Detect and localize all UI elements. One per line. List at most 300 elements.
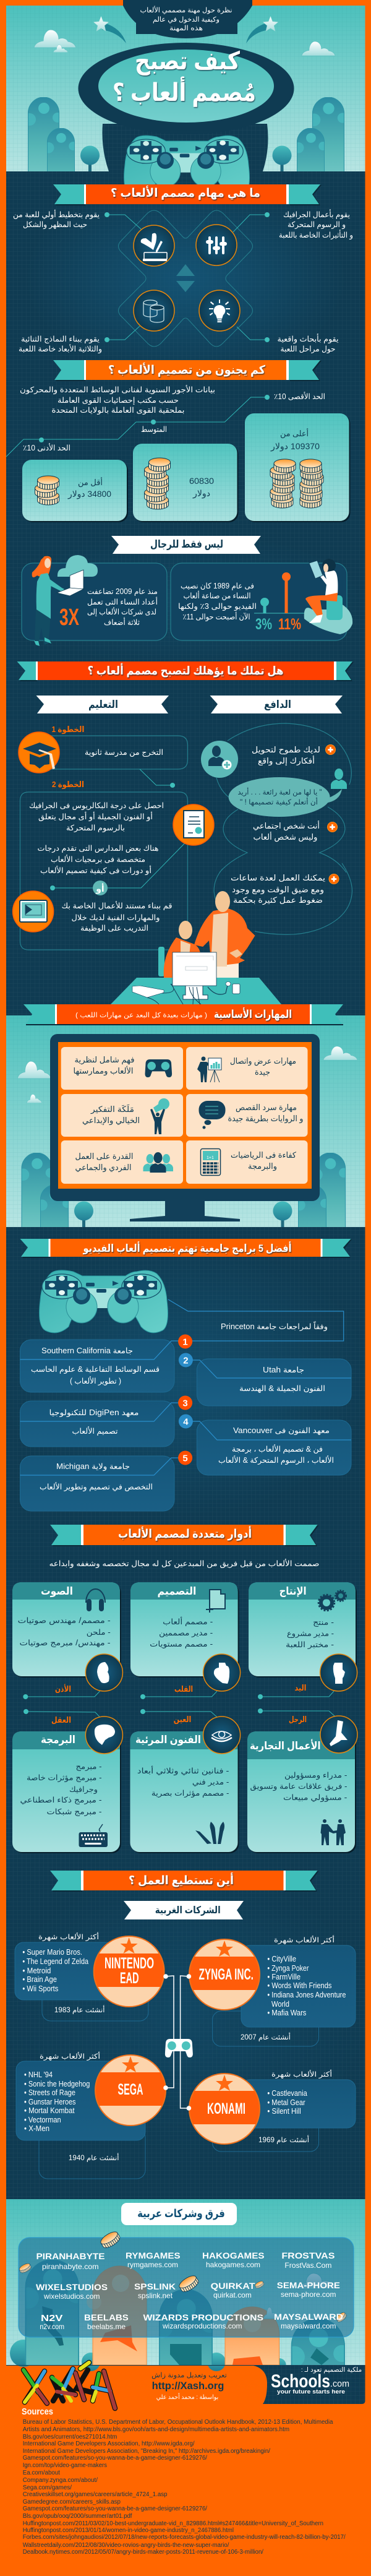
icon: hand (333, 1663, 345, 1684)
banner: do you qualify heading: هل تملك ما يؤهلك لتصبح مصمم ألعاب ؟ (88, 663, 283, 678)
banner: where to work heading (50, 1871, 319, 1892)
label: wage levels: الحد الأقصى 10٪ (274, 392, 325, 401)
company: sega: SEGA (117, 2081, 143, 2098)
text: wages intro: حسب مكتب إحصائيات القوى العاملة (58, 396, 179, 405)
cloud: right (323, 1046, 357, 1060)
role card: programming: - مبرمج ذكاء اصطناعي (20, 1796, 101, 1805)
icon: light bulb (209, 299, 230, 322)
task: 2d 3d models: والثلاثية الأبعاد خاصة اللعبة (19, 344, 102, 354)
role card: programming (12, 1731, 121, 1853)
shooting star: left (93, 16, 126, 43)
task: graphics: و الرسوم المتحركة (288, 220, 346, 230)
company: sega: • Mortal Kombat (24, 2106, 75, 2115)
company: sega: • Gunstar Heroes (24, 2097, 76, 2106)
cloud: left small (53, 45, 68, 53)
studio: beelabs (84, 2312, 129, 2331)
speech bubble: quote: أن أتعلم كيفية تصميمها ! " (240, 797, 318, 806)
panel: dark section 1 (6, 124, 365, 1015)
university 4: معهد الفنون فى Vancouver (233, 1426, 330, 1436)
university 3: 3 (182, 1398, 188, 1408)
role card: programming: - مبرمج مؤثرات خاصة (27, 1773, 102, 1783)
skill: math (186, 1140, 308, 1184)
text: arabization credit: http://Xash.org (152, 2380, 224, 2392)
ribbon: motivation: الدافع (264, 699, 291, 711)
role card: business: الأعمال التجارية (250, 1739, 321, 1752)
icon: ear (97, 1662, 109, 1683)
icon: keyboard (132, 984, 183, 1004)
company: nintendo: EAD (120, 1970, 139, 1987)
university 2: جامعة Utah (263, 1366, 304, 1374)
role card: production: - مدير مشروع (287, 1629, 334, 1639)
towers: five state towers (18, 2260, 351, 2488)
illustration: woman on cloud (304, 559, 352, 634)
role card: sound (12, 1582, 121, 1678)
text: sources: Bls.gov/oes/current/oes271014.htm (23, 2434, 117, 2440)
skill: imagination (61, 1094, 183, 1137)
company: zynga: • Zynga Poker (267, 1963, 309, 1973)
studio: hakogames: HAKOGAMES (202, 2251, 265, 2260)
text: sources: Huffingtonpost.com/2011/03/02/10-best-undergraduate-vid_n_829886.html#s247466&title=University_of_Southern (23, 2520, 323, 2527)
role card: design (130, 1582, 239, 1678)
icon: desk (111, 978, 281, 1004)
step 2: التدريب على الوظيفة (80, 924, 148, 933)
university 1: قسم الوسائط التفاعلية & علوم الحاسب (31, 1365, 160, 1374)
company: sega: • Vectorman (24, 2115, 61, 2124)
university 2 (179, 1353, 351, 1406)
role card: design: - مدير مصممين (159, 1629, 213, 1638)
ribbon: western companies (124, 1901, 244, 1919)
connector: companies to gamepad (166, 1976, 189, 2108)
icon: plus badge (327, 822, 338, 832)
card: median: دولار (192, 488, 210, 499)
skill: presentation: مهارات عرض واتصال (230, 1056, 296, 1066)
icon: coin stacks (270, 459, 323, 508)
role labels: brain: العقل (51, 1715, 71, 1725)
task: research: يقوم بأبحاث واقعية (277, 334, 339, 344)
step 2: الخطوة 2 (52, 780, 84, 789)
company: nintendo: • Super Mario Bros. (22, 1947, 82, 1957)
role card: production: - منتج (313, 1618, 334, 1627)
panel: motivation bubble 2: أنت شخص اجتماعي (253, 821, 320, 831)
top tab with subtitle: وكيفية الدخول في عالم (153, 16, 220, 24)
company: nintendo: • Metroid (22, 1966, 51, 1975)
company: konami: • Castlevania (267, 2088, 307, 2098)
panel: motivation bubble 2 (220, 807, 346, 872)
banner: designer tasks heading: ما هي مهام مصمم الألعاب ؟ (111, 186, 260, 200)
studio: rymgames: rymgames.com (127, 2260, 178, 2269)
role labels: hand: اليد (294, 1683, 307, 1692)
banner: multiple roles heading: أدوار متعددة لمصمم الألعاب (118, 1526, 252, 1541)
role card: visual arts: - مصمم مؤثرات بصرية (151, 1789, 229, 1798)
skill: presentation (186, 1047, 308, 1090)
studio: quirkat (211, 2281, 255, 2299)
task: graphics: يقوم بأعمال الجرافيك (283, 209, 351, 220)
studio: maysalward (274, 2312, 343, 2330)
university 3: تصميم الألعاب (72, 1426, 118, 1436)
banner: designer tasks heading (53, 184, 322, 205)
role labels: brain (23, 1709, 100, 1725)
panel: motivation bubble 1 (201, 723, 351, 798)
icon: laptop (57, 570, 83, 596)
text: sources: Gamedegree.com/careers_skills.asp (23, 2499, 121, 2505)
studio: wixelstudios: WIXELSTUDIOS (36, 2282, 108, 2292)
icon: headphones (86, 1589, 105, 1611)
role card: design: التصميم (157, 1585, 197, 1597)
company: sega: • Sonic the Hedgehog (24, 2079, 90, 2088)
card: median: 60830 (189, 476, 214, 486)
text: wages intro (20, 385, 215, 415)
step 2: متخصصة فى برمجيات الألعاب (51, 855, 145, 864)
text: sources: Ign.com/top/video-game-makers (23, 2462, 107, 2469)
text: sources: Gamespot.com/features/so-you-wanna-be-a-game-designer-6129276/ (23, 2505, 207, 2512)
panel: women tripled (22, 555, 167, 646)
panel: skills sky (6, 1015, 365, 1274)
company: konami: • Silent Hill (267, 2106, 301, 2116)
role card: design: - مصمم مستويات (150, 1640, 213, 1649)
banner: core skills heading: ( مهارات بعيدة كل البعد عن مهارات اللعب ) (75, 1012, 207, 1019)
text: sources: Creativeskillset.org/games/careers/article_4724_1.asp (23, 2491, 168, 2498)
skill: storytelling: و الروايات بطريقة جيدة (228, 1114, 303, 1124)
university 4: فن & تصميم الألعاب ، برمجة (232, 1444, 323, 1454)
company: sega (16, 2051, 168, 2179)
role card: sound: - ملحن (87, 1628, 111, 1637)
studio: n2v (40, 2313, 64, 2331)
icon: computer monitor (173, 952, 216, 1004)
role card: production (249, 1582, 357, 1678)
company: zynga: • CityVille (267, 1954, 296, 1963)
task: concept sketch (13, 209, 174, 266)
role card: programming: - مبرمج شبكات (47, 1807, 101, 1817)
company: nintendo: • Wii Sports (22, 1984, 59, 1993)
skill: teamwork: القدرة على العمل (75, 1152, 134, 1161)
controller: universities (40, 1270, 168, 1333)
university 2: الفنون الجميلة & الهندسة (239, 1384, 325, 1394)
company: nintendo: • Brain Age (22, 1975, 57, 1984)
role card: programming: البرمجة (41, 1734, 75, 1746)
role card: design: - مصمم ألعاب (163, 1616, 213, 1627)
panel: team list glass (19, 2238, 354, 2337)
chart: pin comparison (254, 572, 304, 633)
text: sources: Ea.com/about (23, 2470, 60, 2476)
university 5: جامعة ولاية Michigan (56, 1462, 130, 1471)
icon: butterfly on tablet (141, 233, 167, 261)
role card: visual arts: - فنانين ثنائي وثلاثي أبعاد (137, 1765, 229, 1776)
text: sources: Wallstreetdaily.com/2012/08/30/video-rovios-angry-birds-the-new-super-mario/ (23, 2542, 229, 2549)
company: konami: أنشئت عام 1969 (258, 2135, 309, 2144)
step 2: والمهارات الفنية لديك خلال (72, 913, 160, 923)
step 2: احصل على درجة البكالريوس فى الجرافيك (29, 801, 164, 811)
role labels: ear: الأذن (55, 1684, 71, 1694)
company: zynga: World (271, 1999, 289, 2009)
role card: business: - فريق علاقات عامة وتسويق (250, 1782, 348, 1791)
studio: wizards productions: wizardsproductions.com (162, 2322, 242, 2330)
studio: wixelstudios (36, 2282, 108, 2301)
company: sega: • Streets of Rage (24, 2088, 75, 2097)
text: sources: Huffingtonpost.com/2013/01/14/women-in-video-game-industry_n_2467886.html (23, 2527, 234, 2534)
studio: wizards productions: WIZARDS PRODUCTIONS (143, 2312, 263, 2322)
company: konami: • Metal Gear (267, 2098, 305, 2107)
banner: multiple roles heading (50, 1525, 319, 1546)
role card: production: الإنتاج (279, 1585, 307, 1598)
role labels: heart (140, 1654, 241, 1699)
text: sources: Artists and Animators, http://www.bls.gov/ooh/arts-and-design/multimedia-artists-and-animators.htm (23, 2426, 289, 2433)
banner: core skills heading: المهارات الأساسية (214, 1007, 292, 1021)
task: research: حول مراحل اللعبة (281, 345, 335, 354)
university 3 (20, 1396, 192, 1447)
icon: sliders (206, 236, 227, 254)
card: top 10 percent (245, 413, 350, 522)
panel: women share: النساء من صناعة ألعاب (183, 590, 251, 601)
university 1: 1 (182, 1337, 188, 1348)
step 2: قم ببناء مستند للأعمال الخاصة بك (62, 901, 173, 911)
studio: piranhabyte: piranhabyte.com (42, 2262, 99, 2271)
task: research (199, 290, 339, 354)
title ellipse (78, 43, 294, 134)
title ellipse: مُصمم ألعاب ؟ (113, 76, 256, 107)
icon: plus badge (325, 744, 336, 755)
university 3: معهد DigiPen للتكنولوجيا (49, 1408, 139, 1418)
panel: schools.com credit: .com (330, 2379, 349, 2389)
skill: game theory (61, 1047, 183, 1090)
cloud: behind right names (296, 2273, 340, 2289)
studio: frostvas: FROSTVAS (281, 2251, 335, 2260)
skill: game theory: الألعاب وممارستها (73, 1066, 134, 1076)
company: zynga: • FarmVille (267, 1972, 301, 1981)
panel: women share: الآن أصبحت حوالى 11٪ (183, 611, 250, 622)
icon: cloud behind laptop (58, 555, 98, 577)
ribbon: not only for men (111, 536, 261, 554)
company: zynga: أنشئت عام 2007 (241, 2032, 291, 2041)
university 5: التخصص في تصميم وتطوير الألعاب (40, 1482, 153, 1492)
role card: business (247, 1731, 356, 1853)
banner: do you qualify heading (17, 661, 354, 681)
connectors: wage levels (6, 395, 270, 457)
task: graphics (196, 209, 353, 265)
label: wage levels (23, 392, 325, 452)
card: bottom 10 percent: أقل من (78, 477, 103, 488)
panel: hero sky (6, 6, 365, 215)
icon: portfolio monitor (20, 900, 47, 922)
pill: arab companies heading: فرق وشركات عربية (137, 2207, 225, 2220)
towers: left (17, 1153, 93, 1274)
towers: right (272, 97, 348, 215)
icon: graduation cap (23, 743, 56, 769)
studio: piranhabyte: PIRANHABYTE (36, 2251, 105, 2261)
text: sources (22, 2406, 346, 2556)
university 4 (179, 1415, 351, 1475)
text: sources: Dealbook.nytimes.com/2012/05/07/angry-birds-maker-posts-2011-revenue-of-106-3-million/ (23, 2549, 263, 2556)
monitor: skills grid (50, 1034, 320, 1221)
company: zynga: • Indiana Jones Adventure (267, 1990, 346, 1999)
studio: n2v: n2v.com (40, 2322, 64, 2331)
task: 2d 3d models (19, 290, 174, 354)
company: sega: أكثر الألعاب شهرة (40, 2051, 100, 2061)
role card: sound: - مهندس/ مبرمج صوتيات (20, 1639, 110, 1648)
skill: math: 1+1 (207, 1156, 214, 1160)
speech bubble: quote (229, 769, 347, 817)
panel: motivation bubble 3 (214, 863, 352, 934)
banner: top five programs heading: أفضل 5 برامج جامعية تهتم بتصميم ألعاب الفيديو (83, 1241, 292, 1255)
panel: motivation bubble 3: ضغوط عمل كثيرة بحكمة (233, 895, 323, 905)
panel: schools.com credit: Schools (271, 2371, 330, 2392)
cloud: small left (27, 1094, 42, 1103)
task: concept sketch: يقوم بتخطيط أولي للعبة من (13, 209, 100, 220)
company: sega: • X-Men (24, 2124, 49, 2133)
cloud: small name (263, 2307, 278, 2319)
banner: top five programs heading (20, 1239, 352, 1258)
role card: programming: - مبرمج (75, 1762, 101, 1772)
studio: n2v: N2V (41, 2313, 62, 2324)
role card: sound: الصوت (41, 1585, 73, 1598)
task: 2d 3d models: يقوم ببناء النماذج الثنائية (21, 335, 100, 344)
panel: motivation bubble 2: وليس شخص ألعاب (254, 832, 318, 842)
studio: wizards productions (143, 2312, 263, 2330)
ribbon: education: التعليم (88, 699, 118, 710)
role labels: leg (258, 1708, 335, 1724)
icon: keyboard (79, 1824, 108, 1847)
panel: women share: فى عام 1989 كان نصيب (181, 582, 254, 590)
text: sources: Gamespot.com/features/so-you-wanna-be-a-game-designer-6129276/ (23, 2455, 207, 2462)
university 4: 4 (183, 1417, 189, 1427)
skill: math: كفاءة فى الرياضيات (231, 1150, 297, 1160)
studio: hakogames: hakogames.com (206, 2260, 260, 2269)
text: sources: Bls.gov/opub/ooq/2000/summer/art01.pdf (23, 2513, 132, 2520)
icon: center triangles (176, 264, 195, 292)
diagram: tasks cross outline (119, 210, 252, 347)
step 2: بالرسوم المتحركة (66, 824, 125, 833)
skill: game theory: فهم شامل لنظرية (74, 1055, 135, 1065)
text: sources: Sources (22, 2406, 53, 2417)
skill: presentation: جيدة (255, 1067, 270, 1077)
skill: teamwork: الفردي والجماعي (75, 1163, 131, 1173)
company: nintendo: أنشئت عام 1983 (54, 2005, 104, 2014)
banner: where to work heading: أين تستطيع العمل ؟ (129, 1872, 234, 1887)
role card: visual arts: الفنون المرئية (135, 1734, 201, 1746)
icon: small person (331, 769, 347, 789)
step 1: الخطوة 1 (51, 725, 84, 734)
panel: women tripled: 3X (59, 605, 79, 631)
card: bottom 10 percent (22, 460, 128, 522)
box: princeton review note: وفقاً لمراجعات جامعة Princeton (221, 1320, 328, 1332)
pill: arab companies heading (121, 2203, 237, 2225)
icon: floating coins (19, 2229, 348, 2323)
text: sources: Forbes.com/sites/johngaudiosi/2012/07/18/new-reports-forecasts-global-video-game-industry-will-reach-82-billion-by-2017/ (23, 2534, 346, 2541)
icon: diploma (184, 811, 204, 838)
studio: maysalward: maysalward.com (281, 2322, 336, 2330)
icon: mouse and mug (208, 981, 240, 994)
controller: hero (124, 136, 249, 197)
footer rule (6, 2365, 365, 2366)
ribbon: motivation (210, 696, 343, 713)
icon: heart (214, 1663, 229, 1684)
icon: brain (95, 1725, 115, 1745)
company: sega: أنشئت عام 1940 (69, 2153, 119, 2162)
task: graphics: و التأثيرات الخاصة باللعبة (279, 230, 353, 240)
towers: left (23, 97, 100, 215)
university 4: الألعاب ، الرسوم المتحركة & الألعاب (218, 1455, 334, 1465)
studio: piranhabyte (36, 2251, 105, 2271)
studio: sema-phore (277, 2280, 340, 2299)
text: sources: International Game Developers Association, http://www.igda.org/ (23, 2440, 195, 2447)
skill: storytelling: مهارة سرد القصص (236, 1103, 297, 1113)
university 2: 2 (183, 1355, 189, 1366)
role labels: eye: العين (174, 1715, 191, 1724)
text: arabization credit: بواسطة : محمد أحمد علي (156, 2393, 218, 2401)
step 2: أو الفنون الجميلة أو أى مجال يتعلق (38, 811, 153, 822)
connector: step 1 to step 2 (140, 769, 175, 788)
step 2: أو (95, 883, 104, 894)
company: zynga: • Mafia Wars (267, 2008, 307, 2017)
panel: women tripled: ثلاثة أضعاف (104, 617, 140, 627)
company: konami: أكثر الألعاب شهرة (271, 2069, 332, 2079)
icon: brushes (195, 1822, 224, 1844)
panel: women tripled: أعداد النساء التى تعمل (87, 597, 158, 606)
panel: schools.com credit (250, 2365, 365, 2404)
company: konami: KONAMI (207, 2100, 245, 2117)
studio: maysalward: MAYSALWARD (274, 2312, 343, 2322)
box: princeton review note (168, 1299, 344, 1341)
panel: motivation bubble 1: لديك طموح لتحويل (252, 745, 320, 755)
skill: storytelling (186, 1094, 308, 1137)
text: arabization credit: تعريب وتعديل مدونة زاش (151, 2372, 227, 2379)
text: wages intro: بملحقية القوى العاملة بالولايات المتحدة (52, 406, 184, 415)
task: concept sketch: حيث المظهر والشكل (23, 220, 87, 230)
cloud: left (17, 1061, 51, 1079)
university 1 (20, 1334, 192, 1392)
icon: gears (318, 1590, 346, 1611)
illustration: woman at laptop (32, 556, 64, 646)
icon: handshake (320, 1819, 346, 1845)
icon: coin stack (35, 476, 59, 505)
skill: imagination: مَلَكَة التفكير (90, 1104, 134, 1114)
card: top 10 percent: 109370 دولار (270, 441, 320, 452)
role card: visual arts: - مدير فني (192, 1778, 229, 1787)
card: bottom 10 percent: 34800 دولار (67, 489, 111, 499)
text: sources: International Game Developers Association, "Breaking In," http://archives.igda.org/breakingin/ (23, 2448, 270, 2455)
ribbon: not only for men: ليس فقط للرجال (150, 538, 223, 551)
icon: cylinders (143, 300, 164, 322)
studio: rymgames (126, 2251, 181, 2269)
icon: leg (330, 1720, 348, 1746)
top tab with subtitle (123, 0, 252, 38)
circles: brain eye leg (85, 1716, 357, 1754)
panel: dark section 2 (0, 1227, 371, 2199)
icon: central gamepad (165, 2039, 193, 2057)
company: zynga (187, 1935, 356, 2046)
panel: schools.com credit: ملكية التصميم تعود لـ : (301, 2366, 362, 2374)
studio: spslink: SPSLINK (134, 2281, 176, 2291)
text: sources: Company.zynga.com/about/ (23, 2477, 98, 2484)
panel: women share: الفيديو حوالى 3٪ ولكنها (178, 602, 257, 611)
panel: motivation bubble 3: ومع ضيق الوقت ومع وجود (232, 885, 324, 895)
text: sources: Sega.com/games/ (23, 2484, 72, 2491)
university 5 (20, 1450, 192, 1511)
studio: beelabs: BEELABS (84, 2312, 129, 2322)
university 1: ( تطوير الألعاب ) (70, 1376, 121, 1386)
cloud: left large (34, 30, 76, 48)
ribbon: western companies: الشركات الغربية (155, 1905, 221, 1916)
company: konami (187, 2069, 356, 2152)
role labels: heart: القلب (174, 1684, 193, 1694)
illustration: two men at desk (111, 891, 281, 1004)
role labels: eye (140, 1709, 217, 1724)
role card: sound: - مصمم/ مهندس صوتيات (18, 1616, 111, 1626)
icon: coin stack (145, 458, 171, 509)
studio: spslink: spslink.net (138, 2291, 173, 2300)
speech bubble: quote: " يا لها من لعبة رائعة . . . أريد (237, 787, 322, 797)
banner: core skills heading (23, 1004, 343, 1025)
skill: imagination: الخيالي والإبداعي (82, 1116, 140, 1126)
